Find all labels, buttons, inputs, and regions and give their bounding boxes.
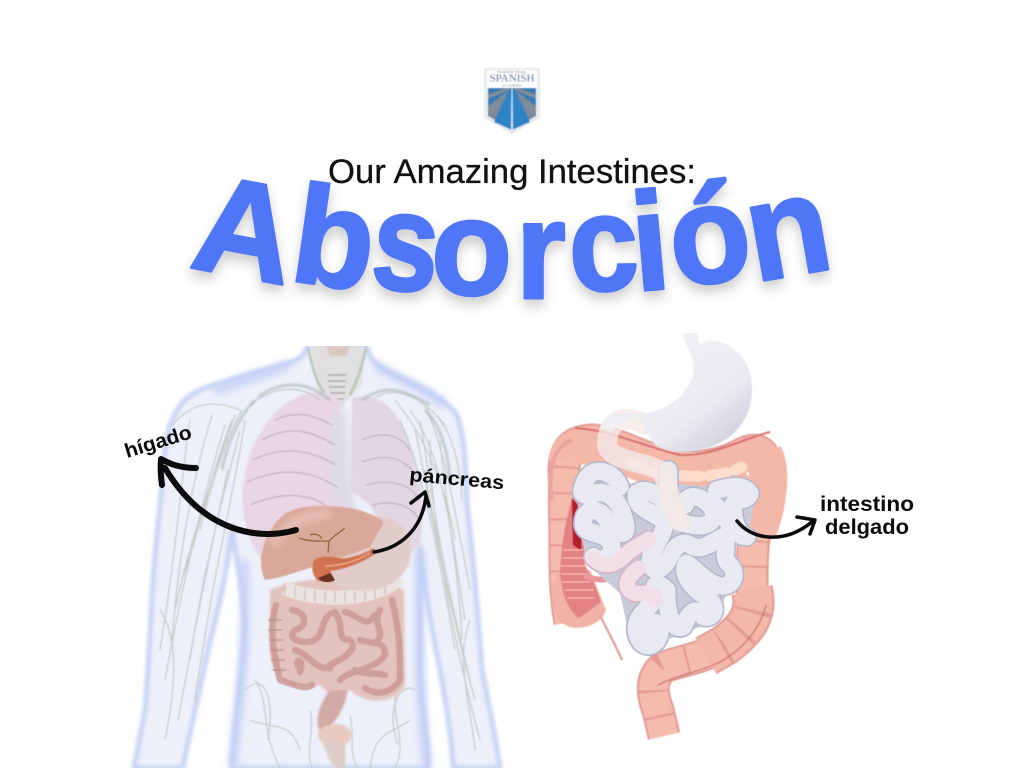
arrow: páncreas [374,492,429,552]
intestines in torso [268,578,405,701]
small intestine [577,467,755,655]
title: Absorción on an arc: o [429,171,515,325]
arrow: intestino delgado [737,517,815,537]
title: Absorción on an arc: b [284,155,385,321]
lungs [243,393,422,565]
label: intestino delgado: delgado [825,516,909,539]
title: Absorción on an arc [183,145,841,328]
title: Absorción on an arc: n [733,145,841,312]
label: hígado: hígado [122,422,194,463]
logo: Homeschool Spanish Academy shield [484,68,540,134]
logo: Homeschool Spanish Academy shield: ACADEMY [502,84,523,88]
figure: digestive tract [551,333,770,736]
logo: Homeschool Spanish Academy shield: HOMESCHOOL [497,70,527,74]
label: intestino delgado [820,493,914,539]
arrow: hígado [161,459,296,534]
opened cecum [560,498,601,618]
cecum base [552,570,606,628]
stomach and duodenum [607,419,680,522]
subtitle: Our Amazing Intestines: [328,153,696,191]
body silhouette [134,346,500,768]
pancreas [312,548,378,582]
logo: Homeschool Spanish Academy shield: SPANISH [490,74,534,84]
title: Absorción on an arc: A [183,145,308,315]
rectum and bladder [317,690,347,733]
figure: translucent human torso [134,346,500,768]
nerves and vessels [160,389,480,768]
torso side glow [215,365,445,768]
liver [261,506,384,580]
bile ducts [299,528,345,553]
title: Absorción on an arc: s [366,163,446,323]
title: Absorción on an arc: i [625,162,675,321]
label: páncreas: páncreas [409,464,505,494]
neck [310,346,364,410]
title: Absorción on an arc: c [565,166,642,321]
title: Absorción on an arc: ó [660,152,759,317]
label: intestino delgado: intestino [820,493,914,516]
appendix and ileum [600,615,622,660]
stomach behind liver [322,516,411,591]
large intestine [551,428,770,736]
title: Absorción on an arc: r [516,173,566,328]
